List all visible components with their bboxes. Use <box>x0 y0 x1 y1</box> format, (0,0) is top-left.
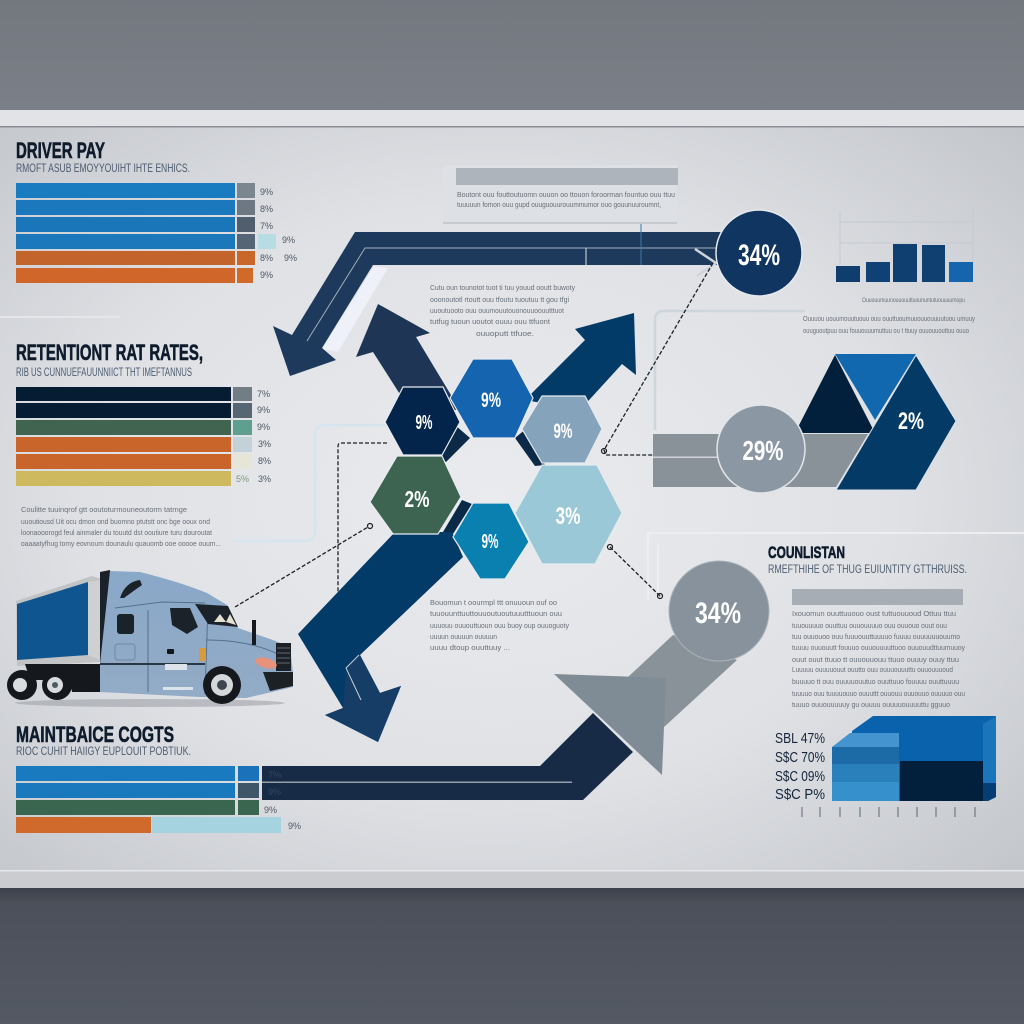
bar chart: retention rates: 7% <box>257 389 270 399</box>
bar chart: driver pay: 9% <box>260 187 273 197</box>
text block: center top note: Cutu oun tounotot tuot ti tuu youud ooutt buwoty <box>430 283 575 292</box>
truck shadow <box>15 699 285 707</box>
chassis <box>25 664 100 692</box>
text block: top header note: Boutont ouu fouttoutuomn ouuon oo ttouon foroorman fountuo ouu ttuu <box>457 190 675 199</box>
text block: conclusion body: tuuuu ouuouutt fouuuo ouuouuuuttuoo ouuouudttuumuuoy <box>792 643 965 652</box>
bar chart: driver pay: 9% <box>282 235 295 245</box>
3D block chart <box>832 716 996 801</box>
text block: center top note: uuoutuooto ouu ouumouutouonouuoouutttuot <box>430 306 565 315</box>
text block: top right note <box>803 314 975 335</box>
text block: top right note: ouuguoutpuu ouu fouuouuumuttuu ou t ttuuy ouuouuouttuu ouuo <box>803 326 969 335</box>
bar chart: driver pay: 8% <box>260 253 273 263</box>
text block: center top note: ouuoputt ttfuoe. <box>476 329 534 338</box>
subheading: retention rates: RIB US CUNNUEFAUUNNIICT THT IMEFTANNUS <box>16 365 192 379</box>
grey arrowhead <box>554 674 666 775</box>
blue triangle <box>835 354 916 420</box>
text block: center lower note: tuuouunttuuttouuoutuoutuuutttuoun ouu <box>430 609 562 618</box>
text block: conclusion body: ouut ouut ttuuo tt ouuouuouu ttuuo ouuuy ouuy ttuu <box>792 655 959 664</box>
dark triangle <box>795 355 875 433</box>
bar chart: maintenance costs: 7% <box>268 770 281 780</box>
hex connectors <box>438 425 545 534</box>
arrow: up-right navy <box>525 313 636 410</box>
stripe accent <box>199 648 206 661</box>
chart labels: SBL 47% <box>775 730 825 747</box>
hexagon: green: 2% <box>404 486 430 512</box>
dark band <box>262 713 633 800</box>
background wall bottom <box>0 888 1024 1024</box>
subheading: driver pay: RMOFT ASUB EMOYYOUIHT IHTE ENHICS. <box>16 161 190 175</box>
arrow: down-left navy <box>298 532 463 742</box>
chart labels: S$C 09% <box>775 768 825 785</box>
hexagon: blue <box>450 359 533 438</box>
text block: center lower note: uuuouu ouuouttuoun ouu buoy oup ouuoguoty <box>430 621 569 630</box>
subheading: maintenance costs: RIOC CUHIT HAIIGY EUPLOUIT POBTIUK. <box>16 744 191 758</box>
hexagon: navy <box>385 387 460 455</box>
heading: conclusion: COUNLISTAN <box>768 543 845 562</box>
text block: center top note <box>430 283 575 338</box>
faint frame: right middle <box>655 311 805 430</box>
callout circle: 34 percent top <box>716 210 802 296</box>
bar chart: retention rates: 9% <box>257 405 270 415</box>
text block: retention notes: loonaooorogd feul ainmaler du touutd dst ooutiure turu douroutat <box>21 528 213 537</box>
hexagon: light blue <box>515 465 622 564</box>
panel: retention rates <box>16 340 271 548</box>
text block: conclusion body: tuuuo ouuouuuuuy gu ouuuu ouuuuouuuuttu gguuo <box>792 700 950 709</box>
mirror post <box>252 620 256 645</box>
grey band <box>628 635 737 728</box>
dashed connector: light hexagon to grey circle <box>608 544 662 598</box>
text block: center top note: tutfug tuoun uoutot ouuu ouu ttfuont <box>430 317 551 326</box>
callout circle: 34 percent top: 34% <box>738 239 780 272</box>
bar chart: maintenance costs: 9% <box>264 805 277 815</box>
text block: conclusion body: buuuuo tt ouu ouuuuouutuo ouuttuuo fouuuu ouuttuuuu <box>792 677 959 686</box>
grey band <box>653 434 868 487</box>
arrow: up-left navy <box>356 304 460 410</box>
text block: top header note: tuuuuun fomon ouu gupd ouuguouurouummumor ouo gouunuuroumnt, <box>457 200 661 209</box>
text block: conclusion body: tuuuuo ouu tuuuuouuo ouuuttt ouuouu ouuouuo ouuuuo ouu <box>792 689 965 698</box>
mini bar chart: top right: Ouuouumuunouuouuttuoununtutuouuuumopu <box>862 298 965 304</box>
bar chart: maintenance costs: 9% <box>268 787 281 797</box>
dashed connector: truck to green hexagon <box>235 524 372 607</box>
hexagon: teal <box>453 503 529 579</box>
text block: retention notes: Coulitte tuuinqrof gtt ooutoturmouneoutorm tatrnge <box>21 505 187 514</box>
hexagon cluster <box>370 359 622 579</box>
circle: 29 percent <box>717 405 805 493</box>
board bottom edge <box>0 870 1024 888</box>
text block: retention notes: oaaaatyfhug tomy eovnoum dounaulu quauomb ooe ooooe ouum... <box>21 539 221 548</box>
hexagon: light blue: 3% <box>556 503 580 530</box>
callout circle: 34 percent lower <box>669 561 769 661</box>
text block: conclusion body: Luuuuu ouuuuouut ouutto ouu ouuuouuuttu ouuouuuoud <box>792 665 953 674</box>
text block: center lower note <box>430 598 569 652</box>
hexagon: grey blue <box>522 396 602 463</box>
cab windows <box>117 580 238 634</box>
bar chart: retention rates <box>16 387 271 486</box>
background wall top <box>0 0 1024 110</box>
text block: center top note: ooonoutotl rtoutt ouu tfoutu tuoutuu tt gou tfgi <box>430 295 569 304</box>
text block: center lower note: Bouomun t oourmpl ttt onuuoun ouf oo <box>430 598 557 607</box>
chart labels: S$C 70% <box>775 749 825 766</box>
grille and headlight <box>276 643 291 671</box>
axis ticks <box>802 807 975 817</box>
text block: conclusion body <box>792 609 965 709</box>
bar chart: retention rates: 8% <box>258 456 271 466</box>
panel: maintenance costs <box>16 722 301 833</box>
heading: retention rates: RETENTIONT RAT RATES, <box>16 340 203 365</box>
heading: driver pay: DRIVER PAY <box>16 138 105 163</box>
navy hexagon segment <box>836 355 956 490</box>
cab body <box>100 571 293 698</box>
text block: conclusion body: Ixouomun ouuttuuouo oust tuttuouuoud Ottuu ttuu <box>792 609 956 618</box>
chart: layered triangles with 29 percent: 29% <box>742 435 784 466</box>
hexagon: grey blue: 9% <box>554 420 573 443</box>
chart: layered triangles with 29 percent: 2% <box>898 408 924 435</box>
mini bar chart: top right <box>836 212 973 304</box>
bar chart: driver pay: 7% <box>260 221 273 231</box>
heading: maintenance costs: MAINTBAICE COGTS <box>16 722 174 747</box>
grey header bar <box>792 589 963 605</box>
bar chart: retention rates: 9% <box>257 422 270 432</box>
bar chart: retention rates: 3% <box>258 474 271 484</box>
trailer box <box>16 570 110 666</box>
bar chart: maintenance costs: 9% <box>288 821 301 831</box>
text block: conclusion body: tuu ouuouoo ouu fuuuouuttuuuuo fuuuu ouuuuuuouumo <box>792 632 960 641</box>
dashed connector: navy hexagon to left <box>338 443 387 592</box>
bar chart: driver pay: 9% <box>260 270 273 280</box>
chart labels: S$C P% <box>775 786 825 803</box>
wheels <box>7 666 241 704</box>
text block: top right note: Ouuuou uouumouutuouu ouu ouuttuoumuuouuouuuutuou umuuy <box>803 314 975 323</box>
faint frame: lower right <box>648 533 1024 600</box>
hexagon: teal: 9% <box>482 531 499 553</box>
truck illustration <box>7 570 293 707</box>
text block: retention notes: uuoutiousd Uit ocu dmon ond buomno ptutstt onc bge ooux ond <box>21 517 210 526</box>
bar chart: retention rates: 5% <box>236 474 249 484</box>
hexagon: green <box>370 456 461 534</box>
panel: conclusion <box>768 543 996 817</box>
text block: conclusion body: tuuouuuuo ouuttuu ouuouuuuo ouu ouuouo ouut ouu <box>792 621 947 630</box>
arrow: bottom connector rising to triangle <box>262 635 737 800</box>
chart labels <box>775 730 825 803</box>
dashed connector: circle to hexagon to band <box>602 263 713 455</box>
callout circle: 34 percent lower: 34% <box>695 597 741 630</box>
bar chart: driver pay: 8% <box>260 204 273 214</box>
faint frame: left middle <box>233 425 400 541</box>
bar chart: maintenance costs <box>16 766 301 833</box>
hexagon: navy: 9% <box>416 412 433 434</box>
bar chart: retention rates: 3% <box>258 439 271 449</box>
board top edge <box>0 110 1024 127</box>
text block: top header note <box>443 165 678 224</box>
panel: driver pay <box>16 138 297 283</box>
text block: center lower note: uuuun ouuuun ouuuun <box>430 632 497 641</box>
main board panel <box>0 127 1024 870</box>
text block: retention notes <box>21 505 221 548</box>
chart: layered triangles with 29 percent <box>653 354 956 493</box>
arrow: top connector to left <box>273 213 722 376</box>
bar chart: driver pay <box>16 183 297 283</box>
text block: center lower note: uuuu dtoup ouuttuuy ... <box>430 643 510 652</box>
hexagon: blue: 9% <box>481 389 501 412</box>
bar chart: driver pay: 9% <box>284 253 297 263</box>
